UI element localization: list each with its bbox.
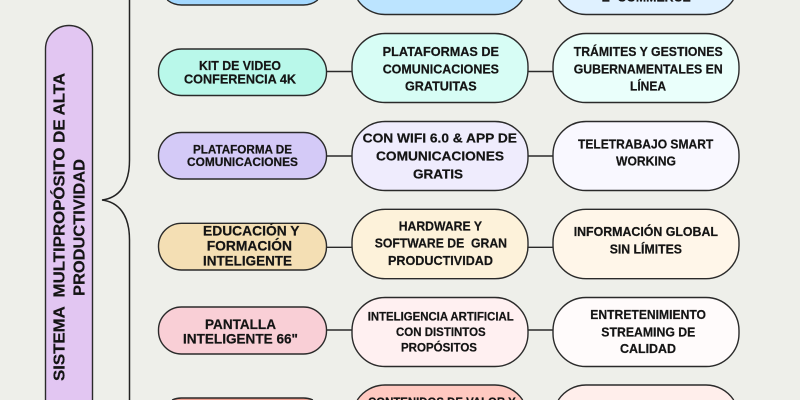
pill: wifi: COMUNICACIONES bbox=[376, 148, 504, 163]
pill: kit de video bbox=[158, 49, 326, 96]
pill: hardware bbox=[352, 209, 528, 279]
pill: informacion global bbox=[553, 209, 739, 279]
pill: wifi: GRATIS bbox=[413, 166, 463, 181]
pill: tramites: TRÁMITES Y GESTIONES bbox=[574, 44, 723, 59]
panel: vertical title pill: PRODUCTIVIDAD bbox=[72, 159, 89, 296]
pill: plataforma de comunicaciones bbox=[158, 132, 326, 179]
pill: educacion: FORMACIÓN bbox=[207, 237, 292, 254]
row 3: communications bbox=[158, 122, 739, 190]
pill: tramites: GUBERNAMENTALES EN bbox=[574, 62, 723, 76]
row 5: display bbox=[158, 298, 739, 366]
row 1 partially cropped bbox=[167, 0, 733, 14]
pill: educacion: INTELIGENTE bbox=[203, 253, 292, 269]
pill: inteligencia artificial: INTELIGENCIA ARTIFICIAL bbox=[368, 311, 514, 323]
panel: vertical title pill bbox=[46, 26, 92, 400]
pill: kit de video: KIT DE VIDEO bbox=[199, 59, 281, 73]
pill: inteligencia artificial: CON DISTINTOS bbox=[396, 327, 486, 339]
pill: wifi bbox=[352, 122, 528, 190]
pill: wifi: CON WIFI 6.0 & APP DE bbox=[363, 130, 517, 145]
pill: teletrabajo: WORKING bbox=[616, 155, 676, 169]
pill: plataformas gratuitas bbox=[352, 34, 528, 102]
pill: entretenimiento: STREAMING DE bbox=[601, 325, 695, 339]
row 2: video conference bbox=[158, 34, 739, 102]
pill: hardware: PRODUCTIVIDAD bbox=[388, 254, 493, 268]
pill: inteligencia artificial bbox=[352, 298, 528, 366]
pill: pantalla bbox=[158, 307, 326, 354]
pill: pantalla: PANTALLA bbox=[205, 316, 276, 332]
pill: informacion global: INFORMACIÓN GLOBAL bbox=[574, 224, 718, 239]
pill: hardware: SOFTWARE DE GRAN bbox=[375, 237, 507, 251]
pill: informacion global: SIN LÍMITES bbox=[610, 241, 682, 256]
pill: pantalla: INTELIGENTE 66" bbox=[183, 331, 298, 347]
pill: inteligencia artificial: PROPÓSITOS bbox=[401, 342, 477, 355]
pill: entretenimiento: CALIDAD bbox=[620, 342, 676, 356]
pill: educacion bbox=[158, 222, 326, 270]
pill: kit de video: CONFERENCIA 4K bbox=[184, 72, 296, 86]
pill: plataformas gratuitas: COMUNICACIONES bbox=[383, 62, 499, 76]
pill: plataformas gratuitas: PLATAFORMAS DE bbox=[383, 45, 499, 59]
pill: plataforma de comunicaciones: PLATAFORMA DE bbox=[193, 144, 292, 156]
panel: vertical title pill: SISTEMA MULTIPROPÓSITO DE ALTA bbox=[50, 73, 68, 381]
pill: plataforma de comunicaciones: COMUNICACIONES bbox=[187, 157, 298, 169]
row 4: education bbox=[158, 209, 739, 279]
brace connector bbox=[102, 0, 130, 400]
row 6 partially cropped bbox=[172, 385, 734, 400]
pill: entretenimiento bbox=[553, 298, 739, 366]
pill: teletrabajo bbox=[553, 122, 739, 190]
pill: plataformas gratuitas: GRATUITAS bbox=[405, 80, 477, 94]
pill: tramites bbox=[553, 34, 739, 102]
pill: hardware: HARDWARE Y bbox=[399, 219, 483, 233]
pill: teletrabajo: TELETRABAJO SMART bbox=[578, 137, 714, 151]
pill: educacion: EDUCACIÓN Y bbox=[203, 222, 300, 239]
pill: entretenimiento: ENTRETENIMIENTO bbox=[590, 308, 706, 322]
pill: tramites: LÍNEA bbox=[630, 79, 666, 94]
